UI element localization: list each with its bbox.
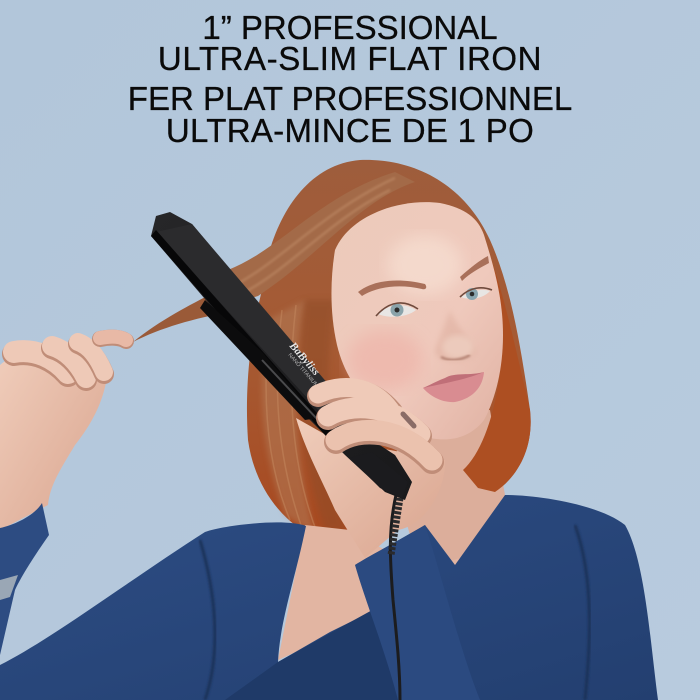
nose xyxy=(435,310,476,361)
hair xyxy=(247,160,531,545)
english heading: 1” PROFESSIONAL xyxy=(202,9,498,46)
flat iron: NANO TITANIUM xyxy=(286,352,319,389)
eyes xyxy=(378,305,416,317)
palm of right hand xyxy=(296,418,445,558)
title xyxy=(128,9,572,149)
fingers of right hand xyxy=(318,388,432,462)
left sleeve xyxy=(0,503,49,655)
lips xyxy=(423,372,484,402)
left hand xyxy=(0,337,126,530)
blue top xyxy=(0,495,658,700)
english heading line 2: ULTRA-SLIM FLAT IRON xyxy=(158,40,542,77)
french heading line 2: ULTRA-MINCE DE 1 PO xyxy=(166,112,534,149)
logo: BaByliss xyxy=(286,339,322,378)
hair strand xyxy=(133,172,415,342)
right hair lock xyxy=(463,250,531,492)
eyebrows xyxy=(358,280,426,296)
french heading: FER PLAT PROFESSIONNEL xyxy=(128,80,572,117)
neck xyxy=(395,410,505,570)
face xyxy=(331,202,503,439)
flat iron xyxy=(151,212,412,500)
cord xyxy=(390,495,400,700)
chest xyxy=(278,525,470,660)
